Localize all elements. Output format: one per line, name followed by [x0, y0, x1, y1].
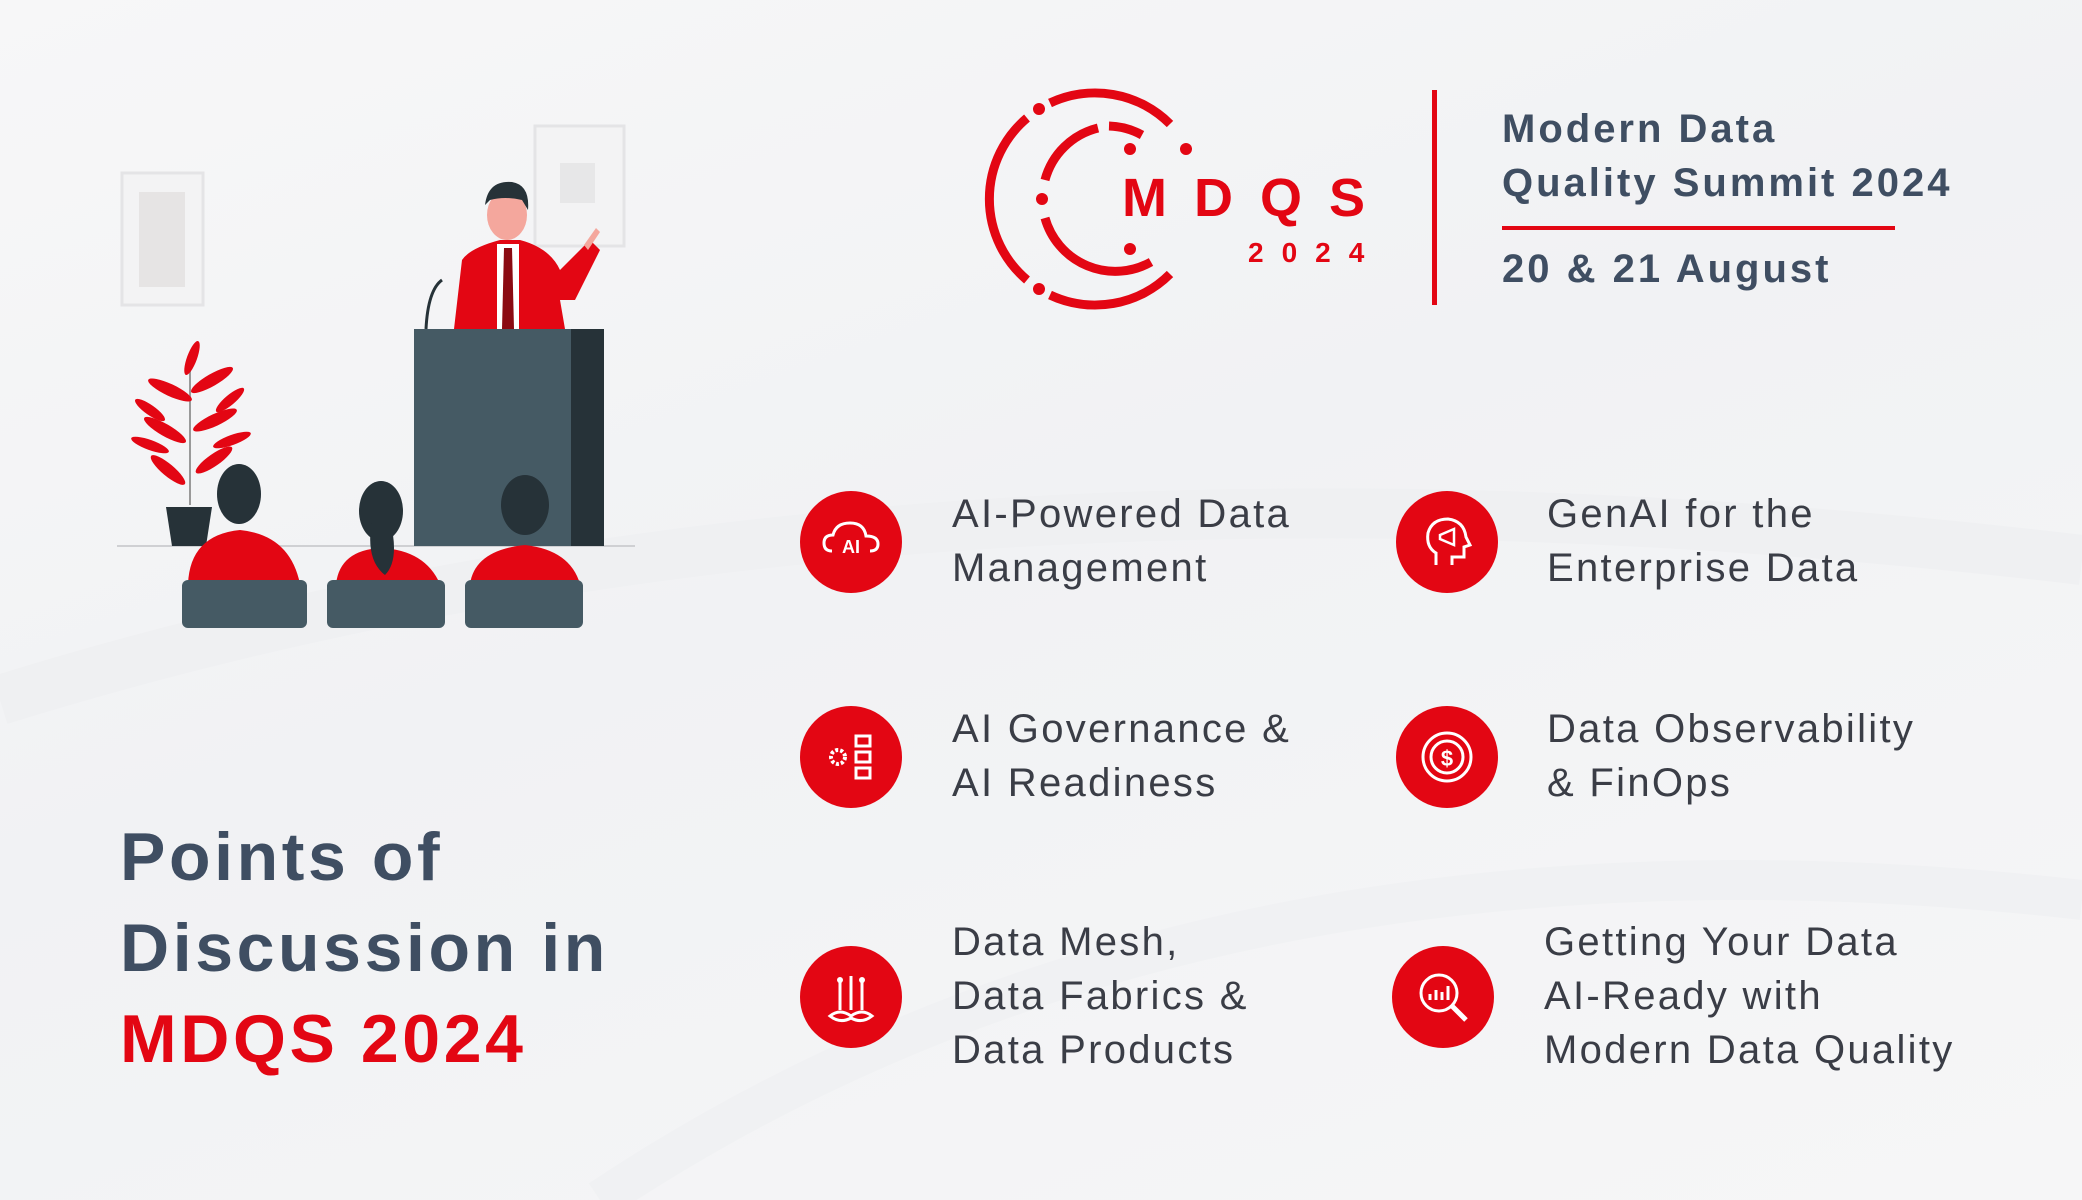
summit title: Modern Data — [1502, 107, 1777, 151]
frames — [122, 173, 203, 305]
topic 2 text: GenAI for the — [1547, 492, 1815, 536]
heading — [120, 819, 609, 1077]
topic 2 text — [1547, 492, 1859, 590]
heading: MDQS 2024 — [120, 1001, 527, 1077]
plant — [189, 360, 191, 505]
topic 6 text: Getting Your Data — [1544, 920, 1899, 964]
topic 3 text: AI Readiness — [952, 761, 1218, 805]
heading: Discussion in — [120, 910, 609, 986]
podium — [414, 329, 604, 546]
topic 4 text: Data Observability — [1547, 707, 1915, 751]
illustration: speaker at podium — [117, 124, 635, 628]
topic 2 icon — [1396, 491, 1498, 593]
topic 3 text — [952, 707, 1291, 805]
topic 1 icon — [800, 491, 902, 593]
summit title: Quality Summit 2024 — [1502, 161, 1952, 205]
topic 6 text — [1544, 920, 1955, 1072]
heading: Points of — [120, 819, 443, 895]
logo: MDQS 2024 — [984, 88, 1392, 310]
topic 5 text — [952, 920, 1249, 1072]
topic 5 text: Data Products — [952, 1028, 1235, 1072]
topic 3 text: AI Governance & — [952, 707, 1291, 751]
speaker — [454, 240, 600, 329]
topic 5 text: Data Mesh, — [952, 920, 1180, 964]
date: 20 & 21 August — [1502, 247, 1831, 291]
topic 2 text: Enterprise Data — [1547, 546, 1859, 590]
topic 4 icon: $ — [1441, 746, 1453, 771]
topic 5 text: Data Fabrics & — [952, 974, 1249, 1018]
topic 6 text: AI-Ready with — [1544, 974, 1823, 1018]
logo: MDQS 2024: MDQS — [1122, 168, 1392, 228]
red underline — [1502, 226, 1895, 230]
topic 4 icon — [1396, 706, 1498, 808]
audience — [188, 530, 580, 584]
topic 6 text: Modern Data Quality — [1544, 1028, 1955, 1072]
topic 5 icon — [800, 946, 902, 1048]
topic 1 text: AI-Powered Data — [952, 492, 1291, 536]
topic 4 text — [1547, 707, 1915, 805]
divider line — [1432, 90, 1437, 305]
topic 4 text: & FinOps — [1547, 761, 1732, 805]
summit title — [1502, 107, 1952, 205]
logo: MDQS 2024: 2024 — [1248, 237, 1382, 268]
topic 1 text — [952, 492, 1291, 590]
topic 1 icon: AI — [842, 537, 860, 557]
topic 1 text: Management — [952, 546, 1208, 590]
topic 6 icon — [1392, 946, 1494, 1048]
topic 3 icon — [800, 706, 902, 808]
